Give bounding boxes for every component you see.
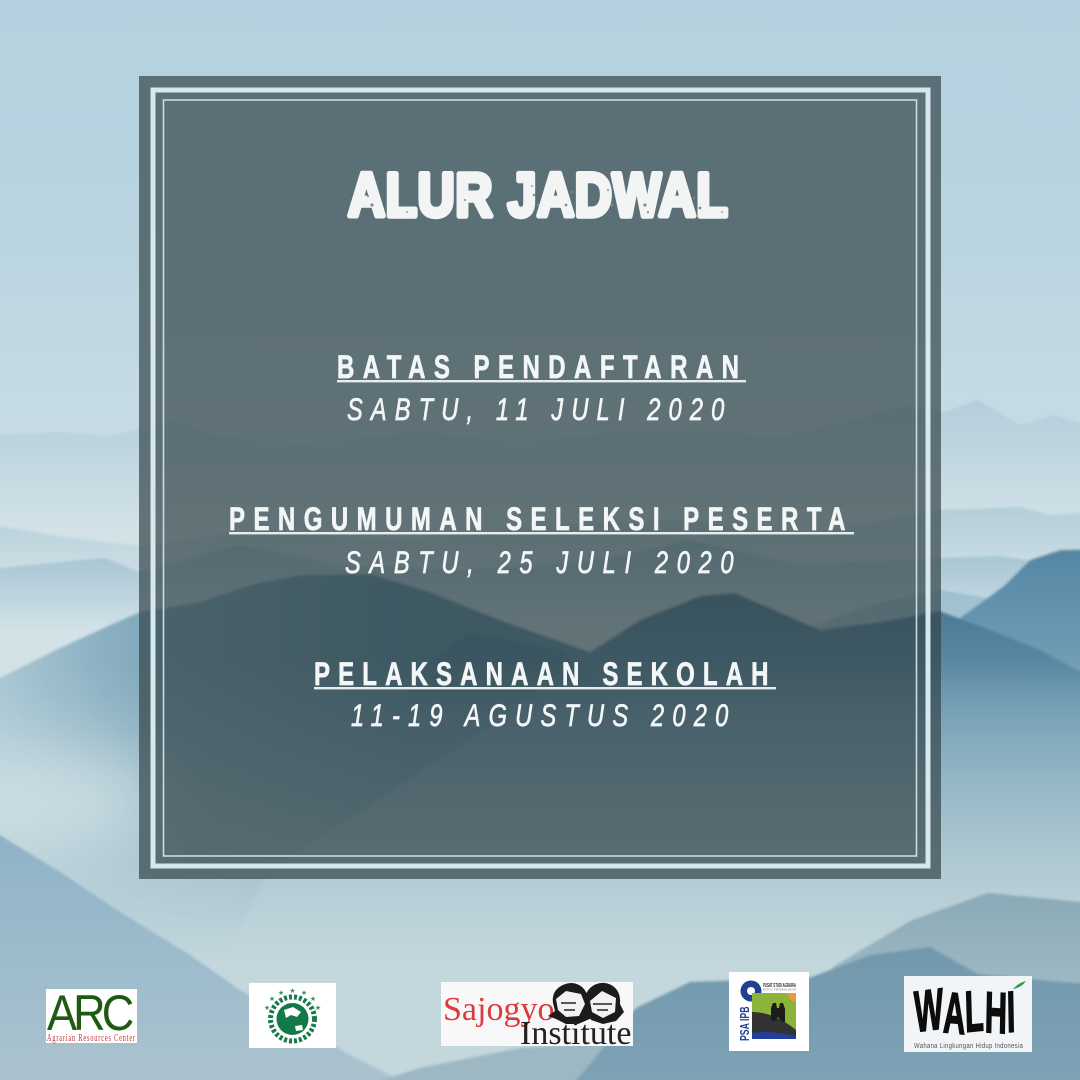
logo: WALHI: WALHI bbox=[913, 976, 1016, 1047]
underline bbox=[229, 532, 854, 534]
title distress specks bbox=[367, 185, 723, 213]
logo: green globe emblem: ★ bbox=[301, 989, 307, 997]
date: SABTU, 11 JULI 2020 bbox=[347, 392, 725, 427]
logo: PSA IPB bbox=[729, 972, 809, 1051]
schedule item: batas pendaftaran bbox=[337, 349, 746, 427]
logos row bbox=[46, 972, 1032, 1052]
logo: green globe emblem: ★ bbox=[310, 995, 316, 1003]
fog patch left bbox=[0, 750, 160, 850]
logo: PSA IPB: INSTITUT PERTANIAN BOGOR bbox=[763, 988, 796, 992]
logo: green globe emblem: ★ bbox=[315, 1004, 321, 1012]
logo: green globe emblem bbox=[249, 983, 336, 1048]
underline bbox=[337, 380, 746, 382]
logo: green globe emblem: ★ bbox=[269, 995, 275, 1003]
date: 11-19 AGUSTUS 2020 bbox=[351, 698, 729, 733]
panel background bbox=[139, 76, 941, 879]
logo: green globe emblem: ★ bbox=[278, 989, 284, 997]
schedule item: pelaksanaan sekolah bbox=[314, 656, 776, 733]
panel: schedule bbox=[139, 76, 941, 879]
logo: PSA IPB: PUSAT STUDI AGRARIA bbox=[763, 982, 796, 988]
heading: BATAS PENDAFTARAN bbox=[337, 349, 739, 385]
logo: PSA IPB: PSA IPB bbox=[738, 1007, 753, 1041]
logo: Sajogyo Institute: Institute bbox=[520, 1015, 631, 1052]
outer frame bbox=[153, 90, 928, 866]
logo: Sajogyo Institute: Sajogyo bbox=[443, 991, 554, 1028]
logo: ARC: Agrarian Resources Center bbox=[47, 1033, 135, 1043]
heading: PELAKSANAAN SEKOLAH bbox=[314, 656, 768, 692]
inner frame bbox=[164, 100, 916, 856]
date: SABTU, 25 JULI 2020 bbox=[345, 545, 734, 580]
title: ALUR JADWAL bbox=[348, 161, 728, 229]
logo: Sajogyo Institute bbox=[441, 982, 633, 1052]
logo: WALHI: Wahana Lingkungan Hidup Indonesia bbox=[914, 1042, 1023, 1050]
icon: two portrait faces bbox=[548, 983, 624, 1024]
heading: PENGUMUMAN SELEKSI PESERTA bbox=[229, 501, 845, 537]
logo: ARC: ARC bbox=[47, 986, 134, 1042]
schedule item: pengumuman seleksi bbox=[229, 501, 854, 580]
logo: green globe emblem: ★ bbox=[289, 987, 296, 995]
underline bbox=[314, 687, 776, 689]
logo: green globe emblem: ★ bbox=[264, 1004, 270, 1012]
